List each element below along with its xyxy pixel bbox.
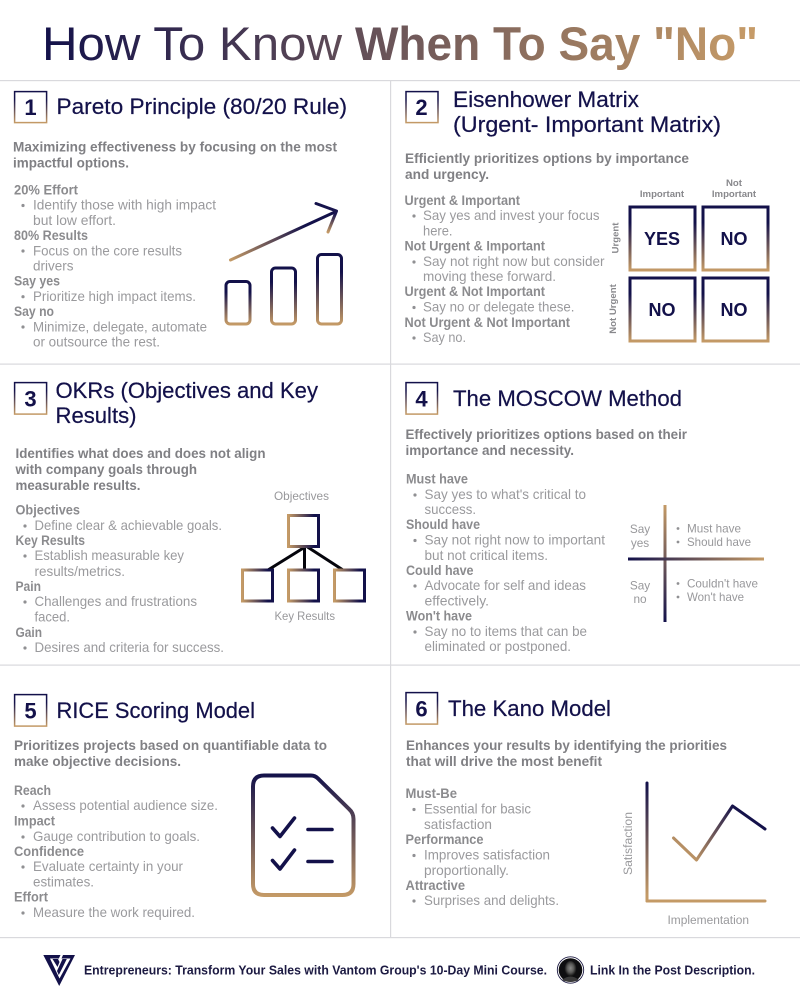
list: OKRs: Pain [16,579,41,594]
panel: 2 Eisenhower Matrix [404,87,768,345]
number badge 2: 2 [415,95,428,120]
list: OKRs: Gain [16,625,42,640]
list: RICE: Reach [14,783,51,798]
description: Kano: Enhances your results by identifying the priorities [406,738,727,753]
list: MOSCOW: but not critical items. [424,548,548,563]
chart: urgent-important matrix: NO [720,229,748,249]
list: Eisenhower: here. [423,224,452,238]
call to action text: Entrepreneurs: Transform Your Sales with Vantom Group's 10-Day Mini Course. [84,962,547,978]
list: MOSCOW: Must have [406,472,468,486]
chart: objectives to key results tree: Key Results [274,609,335,623]
chart: urgent-important matrix: Not [726,178,743,189]
list: RICE [14,783,218,920]
list: RICE: Evaluate certainty in your [33,859,183,874]
chart: urgent-important matrix: Not Urgent [608,283,619,334]
icon: author avatar [557,957,584,983]
list: Pareto [14,182,216,350]
list: Eisenhower: Urgent & Not Important [404,284,545,299]
number badge 6 [406,693,438,724]
description: OKRs: Identifies what does and does not align [16,446,266,461]
list: RICE: Assess potential audience size. [33,798,218,813]
list: Kano: satisfaction [424,817,492,832]
list: Kano: Surprises and delights. [424,893,559,908]
description: OKRs: measurable results. [16,478,140,493]
description: Pareto [13,140,337,170]
list: Eisenhower: Say no. [423,330,466,345]
list: Pareto: Focus on the core results [33,243,182,258]
chart: say yes / say no quadrant: Say [630,578,650,592]
list: MOSCOW: Say yes to what's critical to [424,487,586,502]
list: RICE: estimates. [33,874,94,890]
chart: Kano satisfaction curve [621,783,765,927]
list: OKRs: faced. [34,610,70,624]
description: MOSCOW [406,427,688,458]
number badge 6: 6 [415,696,428,722]
list: Pareto: Minimize, delegate, automate [33,320,207,334]
description: Eisenhower: and urgency. [405,167,489,182]
footer [43,955,755,986]
list: Eisenhower [404,193,605,345]
list: MOSCOW: eliminated or postponed. [424,639,571,654]
chart: say yes / say no quadrant: yes [631,536,649,550]
title: How To Know [42,17,343,70]
chart: say yes / say no quadrant: Couldn't have [687,576,758,590]
number badge 1 [15,92,47,123]
list: Eisenhower: Urgent & Important [404,193,520,208]
list: Pareto: Identify those with high impact [33,198,216,213]
list: Pareto: 20% Effort [14,182,78,198]
chart: say yes / say no quadrant: Must have [687,522,741,536]
description: MOSCOW: importance and necessity. [406,443,574,458]
panel: 5 RICE Scoring Model [14,695,354,920]
list: Kano: Attractive [406,878,465,893]
list: Eisenhower: Not Urgent & Not Important [404,315,570,330]
heading: OKRs: Results) [56,403,136,428]
number badge 5 [15,695,47,726]
list: MOSCOW: Should have [406,517,480,532]
list: RICE: Measure the work required. [33,905,195,920]
heading: RICE: RICE Scoring Model [56,698,255,723]
panel: 1 Pareto Principle [13,92,347,350]
list: Kano: Performance [406,832,484,847]
chart: say yes / say no quadrant: no [633,592,647,606]
list: Kano: proportionally. [424,863,509,878]
list: OKRs: results/metrics. [34,564,125,579]
heading: MOSCOW: The MOSCOW Method [453,386,682,411]
list: Pareto: drivers [33,258,74,274]
description: Eisenhower [405,151,689,182]
list: Kano: Must-Be [406,786,457,801]
number badge 3: 3 [24,386,37,412]
heading: OKRs [56,378,319,428]
chart: urgent-important matrix [608,178,768,341]
list: OKRs [16,502,224,655]
list: Eisenhower: Say yes and invest your focus [423,208,600,223]
list: RICE: Gauge contribution to goals. [33,829,200,844]
chart: objectives to key results tree: Objectives [274,489,329,503]
list: MOSCOW: Could have [406,563,474,578]
list: Kano: Improves satisfaction [424,848,550,862]
list: RICE: Confidence [14,844,84,859]
list: OKRs: Key Results [16,533,85,548]
chart: urgent-important matrix: NO [648,300,676,320]
panel: 3 OKRs [15,378,365,655]
heading: Eisenhower Matrix [453,87,721,137]
chart: say yes / say no quadrant: Say [630,522,650,536]
list: OKRs: Establish measurable key [34,548,184,563]
list: Eisenhower: Say no or delegate these. [423,300,574,314]
list: OKRs: Objectives [16,502,80,518]
list: RICE: Impact [14,814,55,828]
list: MOSCOW: Advocate for self and ideas [424,578,586,593]
description: Pareto: impactful options. [13,156,129,170]
chart: Kano satisfaction curve: Satisfaction [621,812,635,875]
description: OKRs [15,446,265,493]
chart: objectives to key results tree [242,489,364,623]
number badge 4: 4 [415,386,428,412]
list: Pareto: 80% Results [14,228,88,243]
icon: checklist document [253,776,354,895]
chart: Kano satisfaction curve: Implementation [668,913,749,927]
heading: Eisenhower Matrix: (Urgent- Important Matrix) [453,112,721,137]
list: Eisenhower: Not Urgent & Important [404,238,545,254]
list: OKRs: Desires and criteria for success. [34,640,224,655]
heading: OKRs: OKRs (Objectives and Key [56,378,319,403]
list: OKRs: Challenges and frustrations [34,594,197,609]
link text: Link In the Post Description. [590,962,755,978]
number badge 5: 5 [24,698,37,724]
chart: urgent-important matrix: Urgent [610,222,622,253]
number badge 3 [15,383,47,414]
chart: say yes / say no quadrant [628,505,764,622]
list: Kano: Essential for basic [424,802,531,816]
list: Eisenhower: moving these forward. [423,269,556,284]
list: MOSCOW: Won't have [406,608,472,624]
list: Pareto: Prioritize high impact items. [33,289,196,304]
description: Kano: that will drive the most benefit [406,754,602,769]
description: RICE: make objective decisions. [14,754,181,769]
list: MOSCOW: success. [424,502,476,517]
panel: 4 MOSCOW Method [406,383,764,654]
icon: Vantom logo [43,955,75,986]
list: MOSCOW: effectively. [424,594,489,608]
list: Kano [406,786,559,908]
number badge 1: 1 [24,95,37,120]
list: Pareto: or outsource the rest. [33,335,160,350]
description: Eisenhower: Efficiently prioritizes options by importance [405,151,689,166]
list: Pareto: but low effort. [33,213,116,228]
chart: urgent-important matrix: Important [640,189,685,200]
heading: Kano: The Kano Model [448,696,611,721]
chart: say yes / say no quadrant: Should have [687,535,751,549]
description: RICE [14,738,327,769]
description: MOSCOW: Effectively prioritizes options based on their [406,427,688,442]
chart: rising bars with arrow [226,204,342,324]
list: Pareto: Say no [14,304,54,319]
heading: Pareto Principle: Pareto Principle (80/20 Rule) [56,94,347,119]
chart: urgent-important matrix: Important [712,189,757,200]
title [42,17,758,70]
description: RICE: Prioritizes projects based on quantifiable data to [14,738,327,753]
number badge 4 [406,383,438,414]
list: Pareto: Say yes [14,274,60,289]
list: OKRs: Define clear & achievable goals. [34,518,222,533]
description: OKRs: with company goals through [15,462,197,477]
heading: Eisenhower Matrix: Eisenhower Matrix [453,87,639,112]
title: When To Say "No" [355,17,758,70]
list: Eisenhower: Say not right now but consider [423,254,605,269]
list: MOSCOW [406,472,605,654]
chart: urgent-important matrix: NO [720,300,748,320]
list: MOSCOW: Say not right now to important [424,532,605,548]
chart: urgent-important matrix: YES [644,229,680,249]
panel: 6 Kano Model [406,693,765,927]
chart: say yes / say no quadrant: Won't have [687,590,744,604]
number badge 2 [406,92,438,123]
description: Kano [406,738,727,769]
list: MOSCOW: Say no to items that can be [424,624,587,639]
list: RICE: Effort [14,890,48,904]
description: Pareto: Maximizing effectiveness by focusing on the most [13,140,337,154]
